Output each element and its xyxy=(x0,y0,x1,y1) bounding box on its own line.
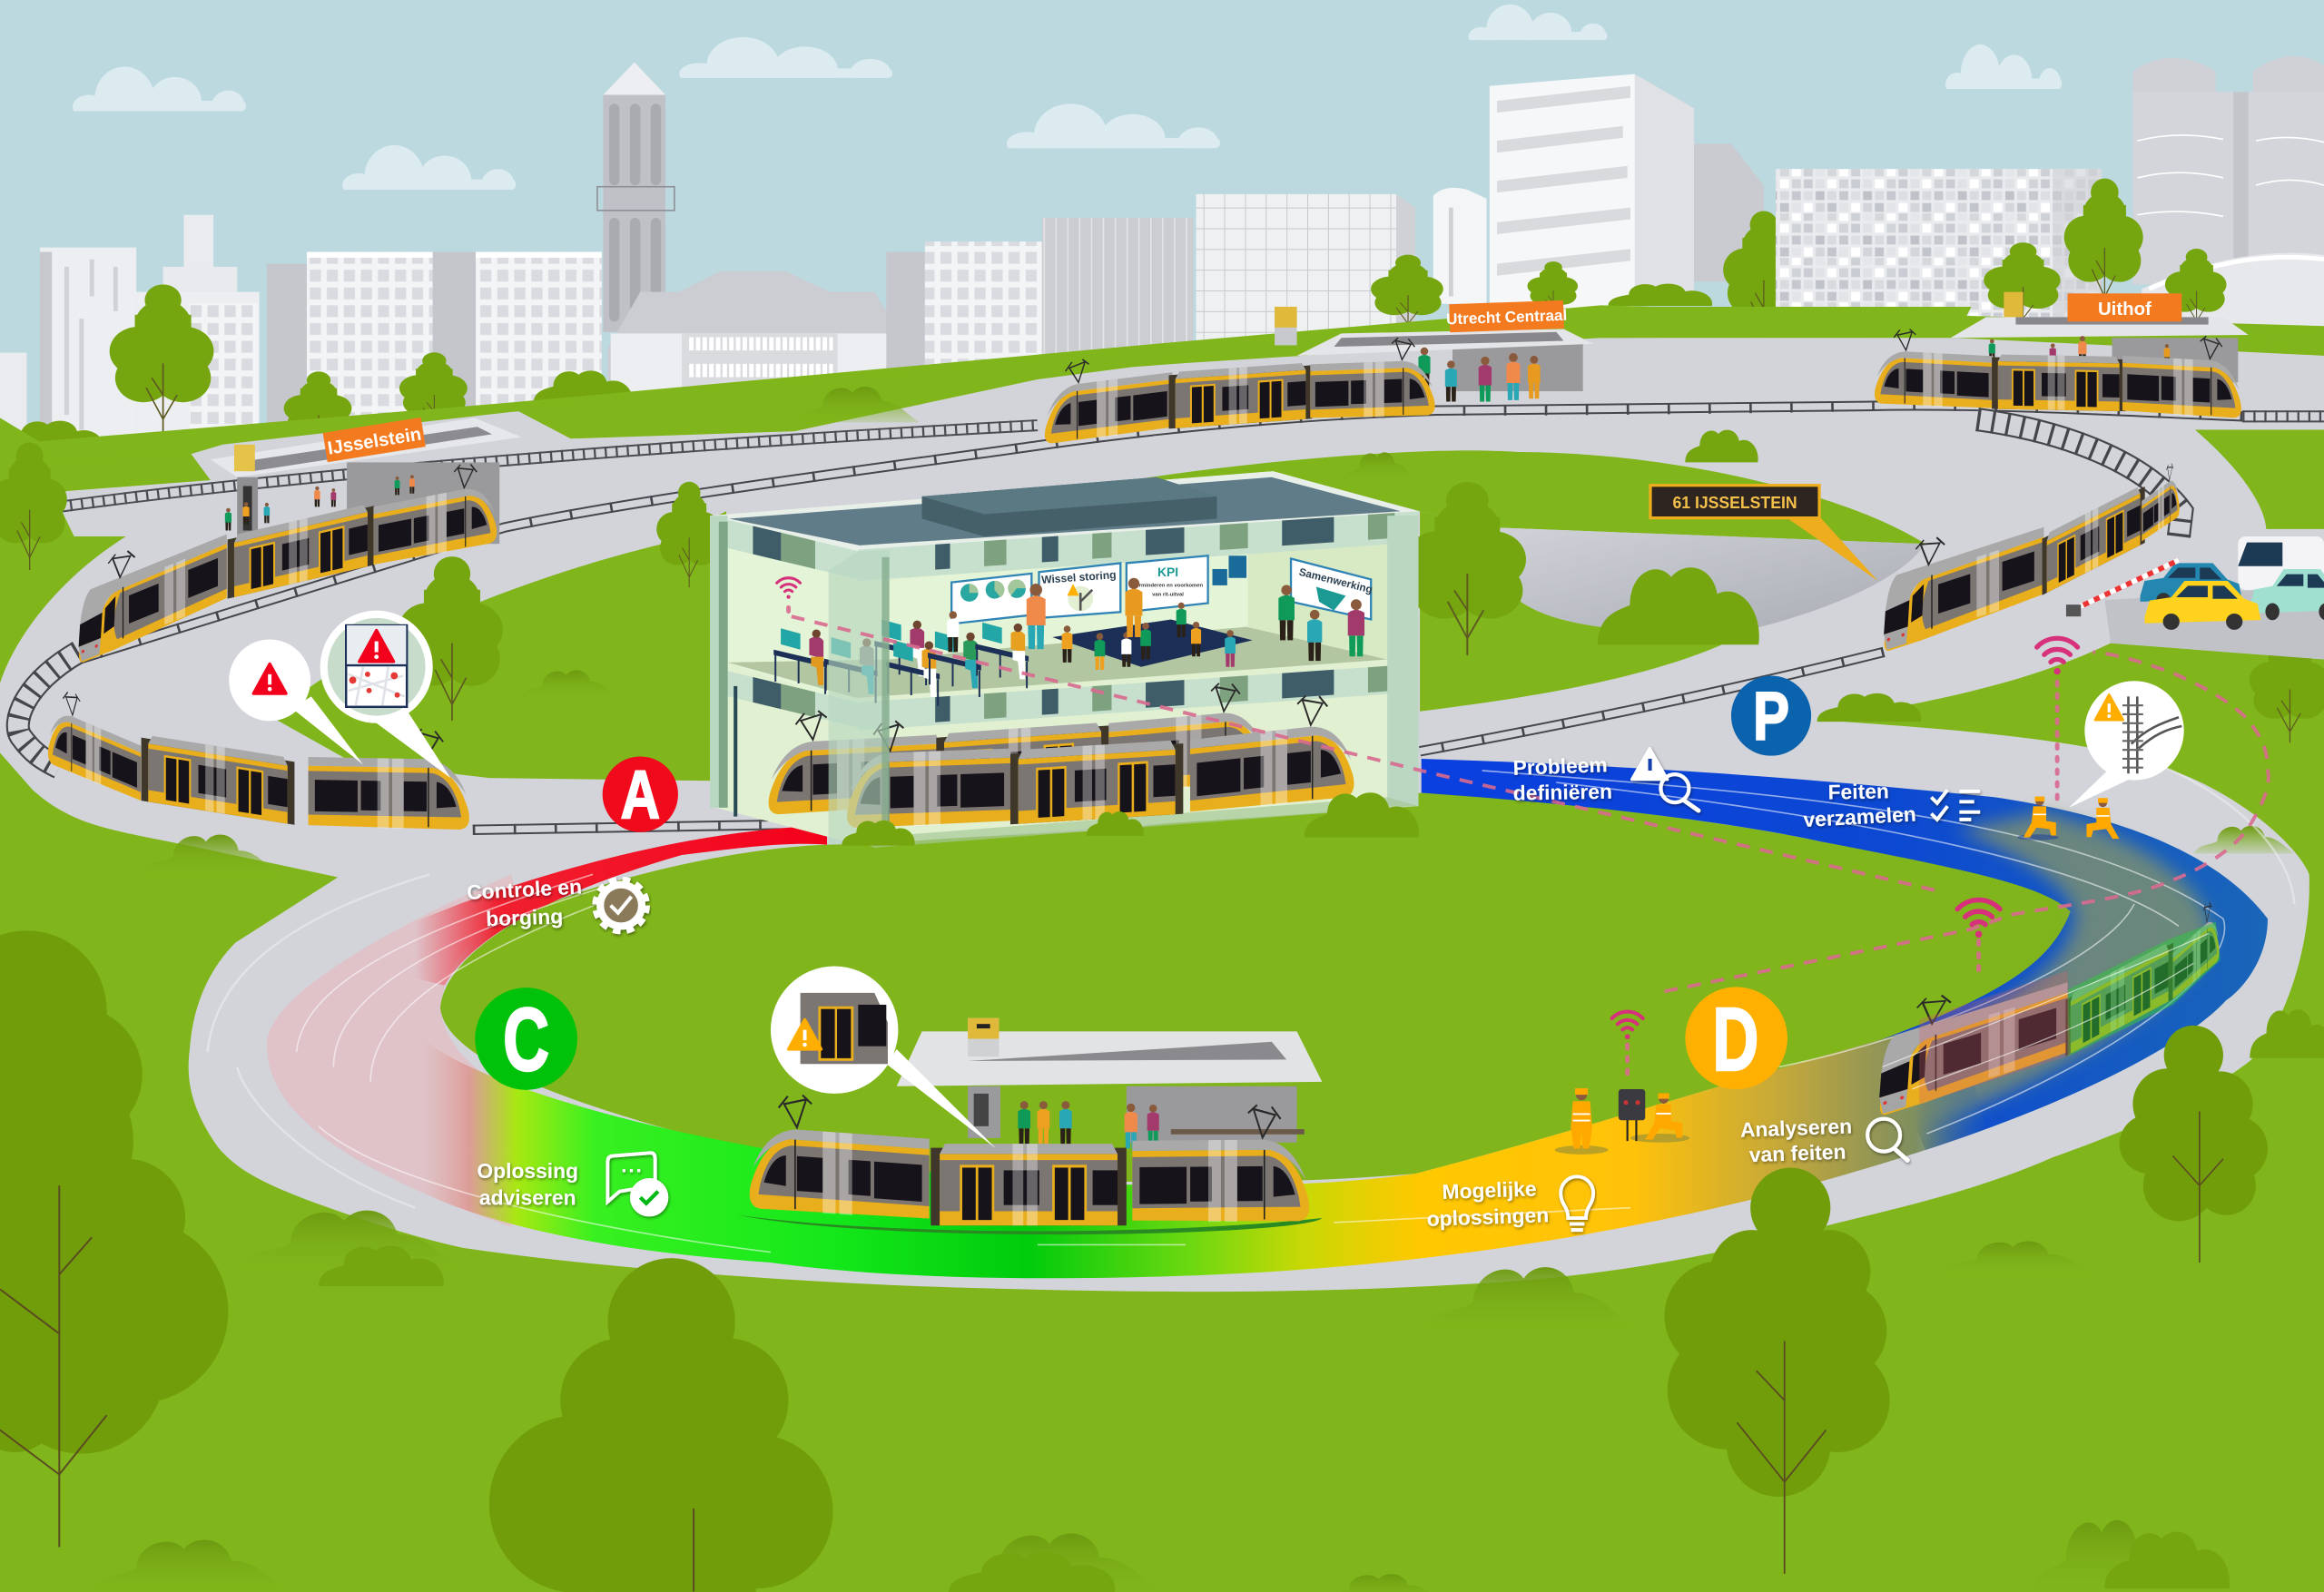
ribbon: plan (blue) xyxy=(1422,759,2268,1150)
screen: Wissel storing: Wissel storing xyxy=(1041,568,1117,586)
PDCA ribbon xyxy=(208,756,2294,1278)
label: Mogelijke oplossingen: Mogelijke xyxy=(1442,1176,1537,1204)
cars and barrier xyxy=(2066,536,2324,660)
callout: warning bubble xyxy=(229,640,363,764)
label: Mogelijke oplossingen xyxy=(1426,1176,1550,1231)
label: Analyseren van feiten xyxy=(1739,1114,1852,1166)
ribbon: act (pink curve) xyxy=(267,874,518,1227)
wall screens xyxy=(951,555,1374,624)
grass patches around the roads xyxy=(0,307,2324,781)
building: frame posts xyxy=(710,516,1418,817)
screen: KPI: KPI xyxy=(1157,565,1178,579)
label: Controle en borging: borging xyxy=(486,904,564,930)
skyline: mosaic building xyxy=(1776,169,2102,317)
underpass shaded road xyxy=(1493,527,1925,630)
badge: A: A xyxy=(621,757,660,833)
station: bottom xyxy=(897,1018,1322,1148)
label: Controle en borging: Controle en xyxy=(466,874,583,904)
passengers xyxy=(1418,348,1541,401)
ribbon: act (red) xyxy=(415,825,827,986)
label: Feiten verzamelen: verzamelen xyxy=(1803,802,1916,831)
label: Controle en borging xyxy=(466,874,583,930)
meeting table with staff xyxy=(1052,603,1253,670)
sign: Uithof xyxy=(2068,293,2181,321)
callout: 61 IJSSELSTEIN destination sign xyxy=(1650,486,1878,581)
sign: Uithof: Uithof xyxy=(2098,300,2152,319)
skyline: centre buildings xyxy=(886,188,1487,370)
callout: 61 IJSSELSTEIN destination sign: 61 IJSSELSTEIN xyxy=(1672,493,1797,512)
tram inside building, rear xyxy=(769,679,1265,815)
small bushes on the grass xyxy=(89,387,2294,1592)
tram: lower left xyxy=(48,683,469,830)
signal lines (dashed) xyxy=(789,607,2269,1082)
icon: light bulb xyxy=(1561,1176,1593,1230)
label: Feiten verzamelen: Feiten xyxy=(1827,779,1889,804)
callout: switch fault bubble xyxy=(2069,681,2184,808)
badge: D xyxy=(1685,987,1787,1090)
tram: on the ribbon (right) xyxy=(1879,892,2221,1116)
building: roof xyxy=(710,471,1418,553)
lower floor base xyxy=(852,797,1418,848)
label: Mogelijke oplossingen: oplossingen xyxy=(1426,1203,1550,1231)
clouds xyxy=(73,5,2062,208)
label: Feiten verzamelen xyxy=(1803,779,1916,831)
passengers xyxy=(225,475,415,531)
foreground tree: right small xyxy=(2120,1026,2268,1263)
workers at the switch xyxy=(2017,797,2119,840)
standing staff xyxy=(947,578,1364,661)
callout: map bubble xyxy=(320,611,450,778)
control building xyxy=(710,471,1419,848)
skyline: Uithof towers and stadium xyxy=(2132,56,2324,341)
foreground tree: far left xyxy=(0,930,228,1548)
icon: checklist xyxy=(1931,790,1980,820)
rail tracks xyxy=(18,406,2324,830)
label: Oplossing adviseren xyxy=(477,1159,578,1209)
label: Probleem definiëren: definiëren xyxy=(1513,780,1612,805)
tram: Utrecht Centraal xyxy=(1045,337,1435,444)
icon: magnifier xyxy=(1867,1119,1907,1160)
ribbon: check and do (green to yellow) xyxy=(422,1015,1986,1278)
badge: P: P xyxy=(1753,678,1789,754)
trees left and right of the building xyxy=(0,442,2324,742)
road network xyxy=(0,338,2324,1292)
screen: Samenwerking: Samenwerking xyxy=(1297,566,1374,595)
foreground tree: centre xyxy=(489,1258,833,1592)
icon: chat with check xyxy=(607,1153,668,1216)
tram: towards IJsselstein upper xyxy=(79,457,497,664)
label: Probleem definiëren xyxy=(1512,752,1612,805)
station: IJsselstein xyxy=(211,418,522,544)
sign: Utrecht Centraal xyxy=(1446,300,1568,332)
badge: C: C xyxy=(503,991,549,1090)
station: Utrecht Centraal xyxy=(1275,300,1593,401)
label: Oplossing adviseren: Oplossing xyxy=(477,1159,578,1183)
sign: IJsselstein: IJsselstein xyxy=(326,425,423,459)
screen: Samenwerking xyxy=(1291,559,1374,619)
operators at desks xyxy=(773,619,1029,706)
tree behind mosaic building xyxy=(1723,211,1802,342)
ribbon: muddy blend xyxy=(1882,812,2211,1126)
label: Analyseren van feiten: Analyseren xyxy=(1739,1114,1852,1142)
screens: small displays xyxy=(1213,555,1246,585)
workers with signal box xyxy=(1555,1088,1689,1155)
tram: bottom station xyxy=(738,1092,1322,1234)
label: Probleem definiëren: Probleem xyxy=(1512,752,1608,780)
label: Analyseren van feiten: van feiten xyxy=(1748,1140,1846,1166)
callout: door warning bubble xyxy=(771,967,996,1148)
skyline: tall white tower xyxy=(1490,74,1764,311)
screen: KPI: Verminderen en voorkomen xyxy=(1133,584,1204,589)
skyline: university hall xyxy=(607,271,913,400)
building: silhouette xyxy=(710,471,1418,845)
building: upper room walls xyxy=(728,534,1387,698)
label: Oplossing adviseren: adviseren xyxy=(479,1185,576,1209)
building: glass corner column xyxy=(829,550,890,845)
station: Uithof xyxy=(1951,292,2249,382)
ribbon: motion streaks xyxy=(208,756,2294,1253)
badge: D: D xyxy=(1712,991,1758,1090)
wifi icons xyxy=(777,578,2078,1039)
building: facade band with colour blocks xyxy=(858,511,1418,731)
badge: A xyxy=(603,756,678,833)
ribbon interior grass xyxy=(440,792,2073,1183)
badge: C xyxy=(475,988,577,1090)
sign: Utrecht Centraal: Utrecht Centraal xyxy=(1446,306,1568,328)
foreground tree: right xyxy=(1664,1168,1890,1574)
tram: Uithof xyxy=(1875,327,2241,418)
foreground bushes xyxy=(319,1009,2324,1592)
tram: 61 IJsselstein xyxy=(1884,457,2180,653)
passengers xyxy=(1018,1101,1159,1148)
screen: KPI xyxy=(1127,555,1208,612)
screen: KPI: van rit-uitval xyxy=(1152,592,1184,597)
trees behind the stations xyxy=(0,179,2227,454)
badge: P xyxy=(1731,676,1811,756)
screen: Wissel storing xyxy=(1039,563,1120,618)
icon: warning and magnifier xyxy=(1632,749,1699,811)
screen: pie charts xyxy=(951,574,1031,624)
tram inside building, front xyxy=(847,691,1354,829)
skyline: left buildings xyxy=(0,215,602,455)
bushes at building foot xyxy=(842,792,1419,846)
passengers xyxy=(1989,336,2170,366)
skyline: Dom tower xyxy=(597,63,675,332)
icon: gear with check xyxy=(596,880,646,930)
